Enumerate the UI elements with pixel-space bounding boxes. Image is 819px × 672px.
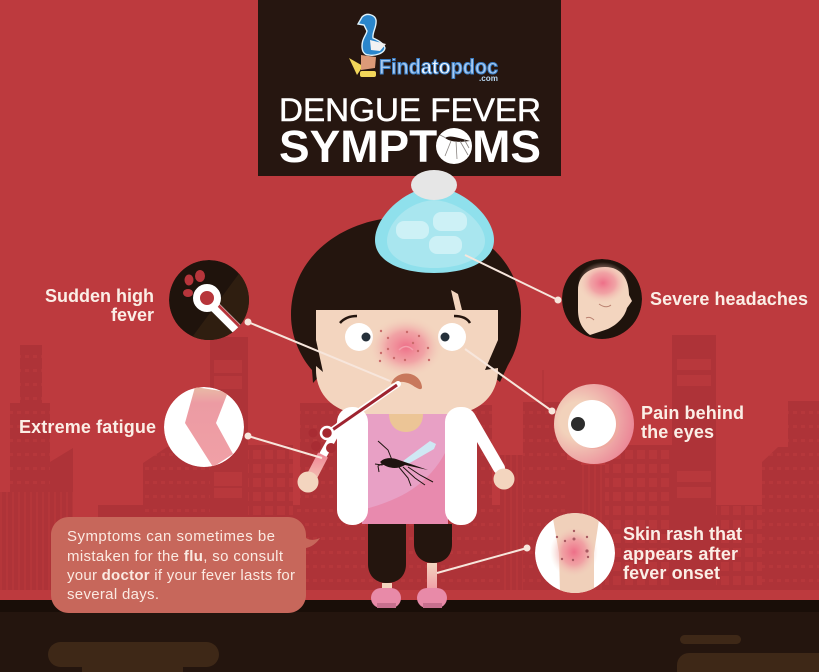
icon: headache face [562, 259, 642, 339]
connector lines [248, 255, 558, 573]
face [316, 310, 498, 414]
sudden high fever label [45, 286, 154, 325]
icon: sore eye [554, 384, 634, 464]
callout: Symptoms can sometimes be [67, 528, 275, 545]
right trouser leg [414, 524, 452, 563]
hair [291, 217, 521, 383]
facial rash [368, 316, 444, 378]
pain behind the eyes label: Pain behind [641, 403, 744, 423]
left trouser leg [368, 524, 406, 583]
left foot [371, 583, 401, 608]
callout: your doctor if your fever lasts for [67, 567, 295, 584]
skin rash label: Skin rash that [623, 524, 742, 544]
logo domain: .com [479, 74, 498, 83]
sudden high fever label: fever [111, 305, 154, 325]
hair lock [451, 290, 462, 312]
right foot [417, 563, 447, 608]
skin rash label: fever onset [623, 563, 720, 583]
pain behind the eyes label: the eyes [641, 422, 714, 442]
left coat panel [337, 407, 368, 525]
callout: several days. [67, 586, 159, 603]
left eye [340, 316, 373, 351]
left arm [298, 425, 340, 492]
mouth [391, 373, 422, 389]
thermometer in mouth [308, 384, 398, 453]
connector dots [244, 296, 562, 552]
shirt [362, 414, 448, 524]
icon: fever thermometer [169, 260, 249, 340]
icon: skin rash [535, 513, 615, 593]
right arm [470, 418, 514, 490]
pain behind the eyes label [641, 403, 744, 442]
ice pack [375, 170, 494, 273]
icon: mosquito in letter O [436, 128, 472, 164]
logo [349, 14, 498, 79]
hair side tips [316, 340, 498, 372]
title panel [258, 0, 561, 176]
skin rash label [623, 524, 742, 583]
callout [51, 517, 320, 613]
right coat panel [445, 407, 477, 525]
icon: mosquito on shirt [375, 441, 436, 486]
title line 2: SYMPTOMS [279, 121, 541, 172]
sudden high fever label: Sudden high [45, 286, 154, 306]
right eye [438, 316, 470, 351]
extreme fatigue label: Extreme fatigue [19, 417, 156, 437]
callout: mistaken for the flu, so consult [67, 548, 284, 565]
icon: sore elbow [164, 387, 244, 467]
character [291, 217, 521, 608]
title line 1: DENGUE FEVER [279, 92, 541, 128]
skin rash label: appears after [623, 544, 738, 564]
city skyline silhouette [0, 335, 819, 590]
ground [0, 600, 819, 672]
logo wordmark: Findatopdoc [379, 56, 498, 79]
severe headaches label: Severe headaches [650, 289, 808, 309]
